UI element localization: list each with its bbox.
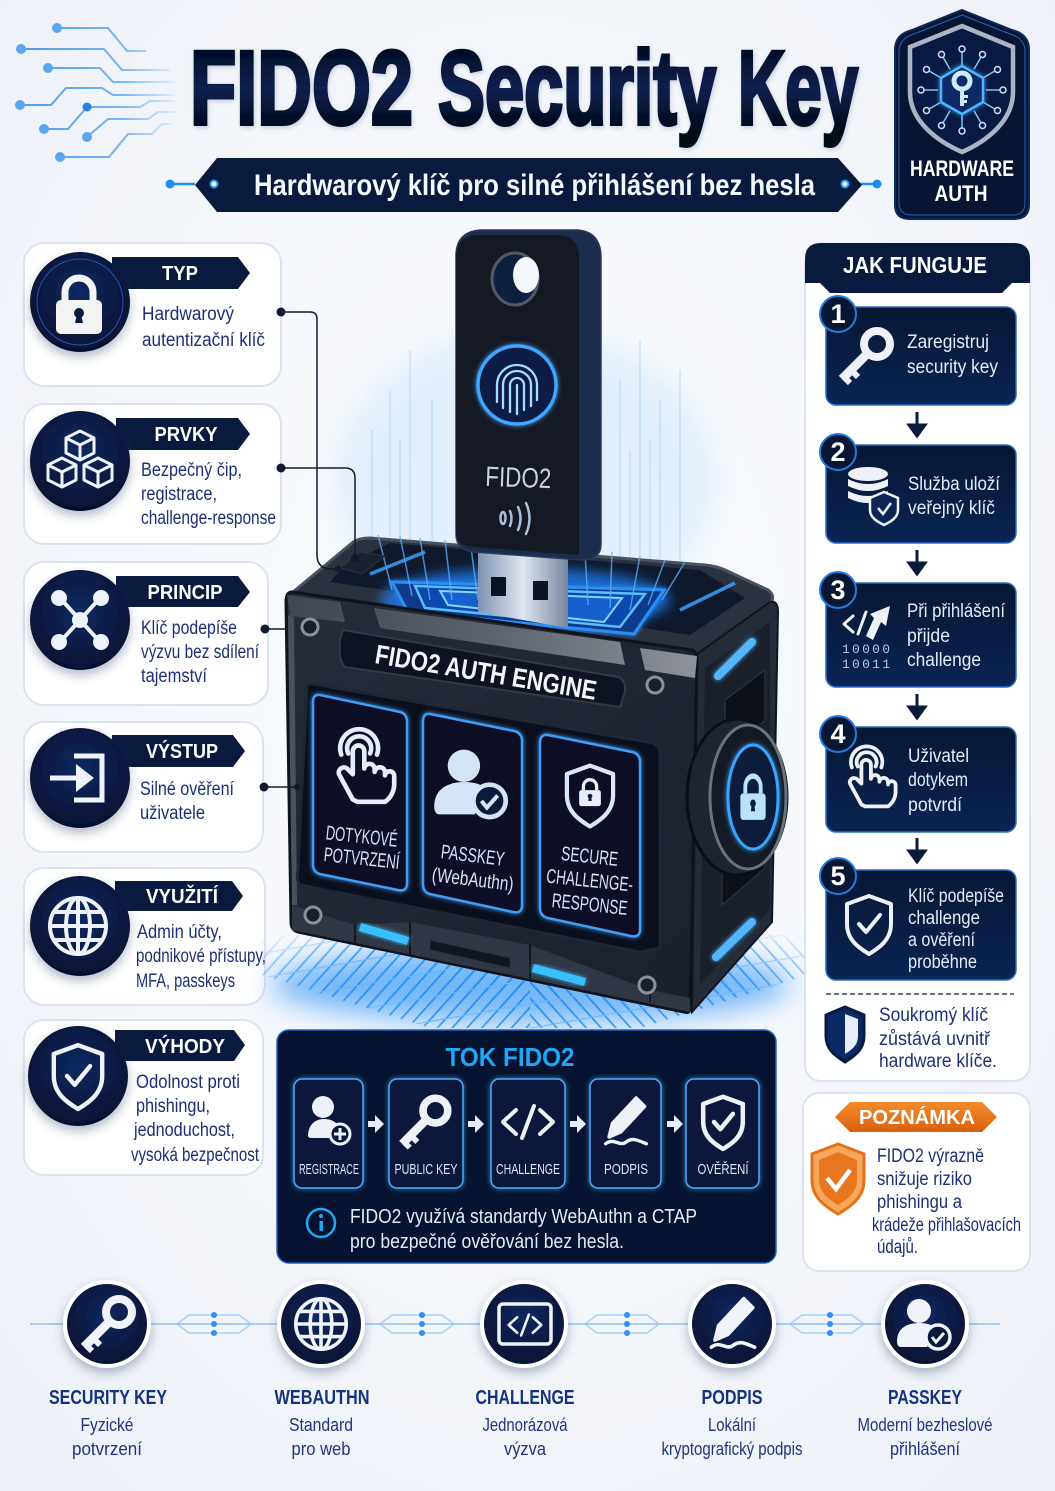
bottom connectors — [30, 1312, 1000, 1336]
engine card: secure challenge-response: RESPONSE — [551, 890, 629, 920]
badge: hardware auth: HARDWARE — [910, 156, 1014, 181]
panel: VÝSTUP: VÝSTUP — [146, 739, 218, 763]
step 5: Klíč podepíše — [908, 886, 1004, 907]
step 2: 2 — [830, 437, 846, 467]
flow card: registrace: REGISTRACE — [299, 1161, 359, 1178]
panel: poznámka: FIDO2 výrazně — [877, 1146, 984, 1167]
engine label plate — [340, 630, 625, 707]
engine card: passkey — [423, 714, 522, 912]
heading: JAK FUNGUJE — [843, 252, 987, 278]
device: FIDO2 auth engine — [286, 535, 787, 1012]
step 4: Uživatel — [908, 746, 969, 767]
circuit decoration — [15, 23, 175, 162]
icon: lock — [30, 252, 130, 352]
glow behind device — [335, 330, 715, 630]
key front face — [456, 235, 579, 555]
flow arrows — [368, 1115, 683, 1133]
step 5: 5 — [830, 861, 846, 891]
panel: PRVKY: Bezpečný čip, — [141, 460, 242, 481]
key label: FIDO2 — [485, 461, 552, 494]
engine right side — [692, 602, 778, 1012]
step 5 — [820, 858, 1016, 980]
step 1: security key — [907, 357, 998, 378]
panel: PRVKY: registrace, — [141, 484, 217, 505]
key body — [456, 230, 601, 560]
panel: VÝSTUP: uživatele — [140, 803, 205, 824]
subtitle banner: Hardwarový klíč pro silné přihlášení bez hesla — [254, 169, 815, 202]
panel: VÝHODY: Odolnost proti — [136, 1072, 240, 1093]
panel: tok FIDO2 — [277, 1030, 776, 1263]
panel: PRINCIP: výzvu bez sdílení — [141, 642, 260, 663]
icon: pen — [690, 1282, 774, 1366]
step 3: 10011 — [842, 657, 890, 672]
info note — [307, 1206, 697, 1253]
step 4 — [820, 716, 1016, 832]
engine card: touch: DOTYKOVÉ — [325, 821, 399, 852]
step 1: 1 — [830, 299, 846, 329]
icon: sign-in arrow — [30, 728, 130, 828]
step 4: dotykem — [908, 770, 968, 791]
flow card: ověření: OVĚŘENÍ — [698, 1161, 749, 1178]
flow card: challenge — [491, 1079, 565, 1188]
engine label plate: FIDO2 AUTH ENGINE — [373, 639, 599, 706]
panel: PRINCIP: PRINCIP — [148, 582, 222, 604]
panel: PRVKY — [24, 404, 281, 544]
security key device — [456, 230, 601, 628]
flow card: public key — [389, 1079, 463, 1188]
arrow — [909, 412, 925, 436]
panel: VYUŽITÍ — [24, 868, 266, 1005]
heading — [805, 243, 1030, 293]
bottom item: security key: potvrzení — [72, 1439, 142, 1459]
USB plug — [478, 545, 568, 628]
icon: shield check — [28, 1026, 128, 1126]
icon: orange shield — [812, 1144, 864, 1214]
step 3: 3 — [830, 575, 846, 605]
panel: VYUŽITÍ: VYUŽITÍ — [146, 884, 218, 908]
engine top face — [287, 535, 773, 656]
panel: PRVKY: PRVKY — [154, 424, 218, 446]
bottom item: security key — [49, 1282, 168, 1459]
bottom item: podpis: PODPIS — [702, 1387, 762, 1409]
private key note: Soukromý klíč — [879, 1005, 988, 1026]
icon: person check — [883, 1282, 967, 1366]
icon: cubes — [30, 411, 130, 511]
subtitle banner — [166, 158, 882, 212]
panel: TYP — [24, 243, 281, 386]
arrow — [909, 838, 925, 862]
bottom item: security key: Fyzické — [80, 1415, 134, 1435]
engine card: passkey: PASSKEY — [440, 841, 506, 871]
panel: VÝHODY: jednoduchost, — [133, 1120, 235, 1141]
step 3: challenge — [907, 650, 981, 671]
engine card: secure challenge-response: SECURE — [560, 843, 619, 871]
step 2: veřejný klíč — [908, 498, 995, 519]
side lock button — [687, 719, 787, 875]
panel: TYP: Hardwarový — [142, 304, 234, 325]
panel: VYUŽITÍ: MFA, passkeys — [136, 971, 235, 992]
panel: VYUŽITÍ: Admin účty, — [137, 922, 222, 943]
panel: poznámka: údajů. — [877, 1237, 918, 1258]
icon: globe — [30, 876, 130, 976]
floor grid glow — [262, 935, 808, 1028]
step 4: potvrdí — [908, 795, 963, 816]
panel: VYUŽITÍ: podnikové přístupy, — [136, 946, 266, 967]
info note: FIDO2 využívá standardy WebAuthn a CTAP — [350, 1206, 697, 1228]
bottom item: webauthn — [274, 1282, 370, 1459]
engine card: secure challenge-response — [540, 735, 640, 936]
badge: hardware auth — [895, 10, 1029, 219]
title: FIDO2 — [190, 30, 413, 147]
panel: poznámka — [803, 1093, 1030, 1271]
panel: TYP: TYP — [162, 263, 198, 285]
flow card: podpis: PODPIS — [604, 1161, 648, 1178]
engine card: passkey: (WebAuthn) — [431, 864, 515, 896]
NFC waves — [500, 503, 530, 534]
step 2 — [820, 434, 1016, 543]
flow card: challenge: CHALLENGE — [496, 1161, 560, 1178]
key ring hole — [492, 253, 539, 305]
panel: PRINCIP: tajemství — [141, 666, 208, 687]
fingerprint ring — [478, 346, 556, 424]
panel: poznámka: phishingu a — [877, 1192, 962, 1213]
engine card: secure challenge-response: CHALLENGE- — [545, 866, 634, 897]
connectors — [260, 308, 359, 792]
flow card: registrace — [294, 1079, 363, 1188]
step 5: proběhne — [908, 952, 977, 973]
engine inner panel — [297, 683, 660, 952]
engine card: touch — [313, 695, 407, 890]
panel: VÝHODY: phishingu, — [136, 1096, 210, 1117]
step 3: 10000 — [842, 642, 890, 657]
flow card: ověření — [686, 1079, 759, 1188]
panel: VÝHODY: vysoká bezpečnost — [131, 1145, 260, 1166]
screws — [302, 619, 663, 993]
step 5: challenge — [908, 908, 980, 929]
private key note — [826, 1005, 997, 1072]
panel: tok FIDO2: TOK FIDO2 — [446, 1042, 574, 1072]
bottom item: challenge: CHALLENGE — [476, 1387, 574, 1409]
bottom item: challenge: Jednorázová — [482, 1415, 568, 1435]
icon: shield with key — [910, 26, 1013, 152]
bottom item: passkey: Moderní bezheslové — [858, 1415, 992, 1435]
step 3: Při přihlášení — [907, 601, 1006, 622]
bottom item: podpis: kryptografický podpis — [662, 1439, 802, 1459]
bottom item: challenge: výzva — [504, 1439, 547, 1459]
flow card: podpis — [590, 1079, 661, 1188]
panel: jak funguje — [805, 243, 1030, 1081]
panel: VÝSTUP — [24, 722, 263, 852]
panel: VÝHODY — [24, 1020, 263, 1175]
title: Key — [738, 30, 858, 147]
icon: network — [30, 570, 130, 670]
bottom item: webauthn: Standard — [289, 1415, 353, 1435]
bottom item: security key: SECURITY KEY — [49, 1387, 168, 1409]
info note: pro bezpečné ověřování bez hesla. — [350, 1231, 624, 1253]
bottom item: webauthn: pro web — [292, 1439, 350, 1459]
step 3 — [820, 572, 1016, 687]
bottom item: passkey — [858, 1282, 992, 1459]
panel: VÝHODY: VÝHODY — [145, 1034, 226, 1058]
title — [190, 30, 858, 147]
icon: globe — [279, 1282, 363, 1366]
bottom item: webauthn: WEBAUTHN — [274, 1387, 370, 1409]
panel: poznámka: snižuje riziko — [877, 1169, 972, 1190]
engine card: touch: POTVRZENÍ — [323, 843, 401, 874]
panel: PRINCIP: Klíč podepíše — [141, 618, 237, 639]
private key note: zůstává uvnitř — [879, 1029, 991, 1050]
step 4: 4 — [830, 719, 846, 749]
title: Security — [438, 30, 716, 147]
arrow — [909, 694, 925, 718]
arrow — [909, 550, 925, 574]
bottom item: podpis — [662, 1282, 802, 1459]
flow card: public key: PUBLIC KEY — [394, 1161, 458, 1178]
icon: key — [65, 1282, 149, 1366]
step 1: Zaregistruj — [907, 332, 989, 353]
step 1 — [820, 296, 1016, 405]
panel: VÝSTUP: Silné ověření — [140, 779, 235, 800]
bottom item: podpis: Lokální — [708, 1415, 756, 1435]
icon: code window — [482, 1282, 566, 1366]
bottom item: passkey: přihlášení — [890, 1439, 960, 1459]
step 5: a ověření — [908, 930, 976, 951]
step 3: přijde — [907, 626, 950, 647]
bottom item: challenge — [476, 1282, 574, 1459]
panel: poznámka: POZNÁMKA — [859, 1106, 975, 1129]
panel: TYP: autentizační klíč — [142, 330, 265, 351]
engine front face — [286, 592, 697, 1012]
step 2: Služba uloží — [908, 474, 1001, 495]
private key note: hardware klíče. — [879, 1051, 997, 1072]
panel: PRVKY: challenge-response — [141, 508, 276, 529]
badge: hardware auth: AUTH — [934, 181, 988, 206]
panel: PRINCIP — [24, 562, 268, 705]
bottom item: passkey: PASSKEY — [888, 1387, 963, 1409]
